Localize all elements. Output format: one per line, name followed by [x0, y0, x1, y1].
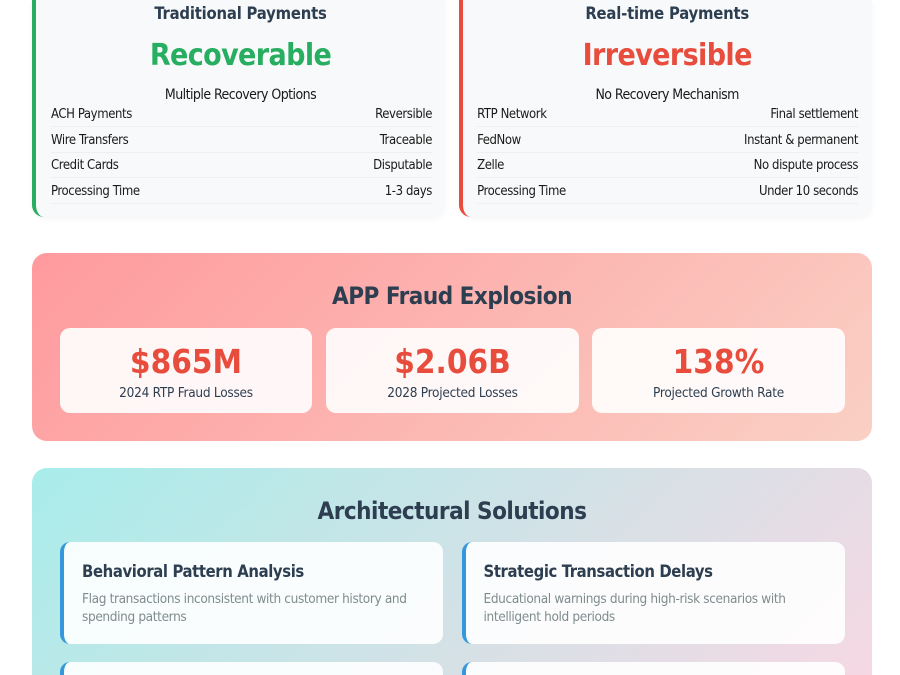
solution card: strategic transaction delays [462, 542, 844, 644]
solution title: Strategic Transaction Delays [484, 562, 713, 581]
row: FedNow [477, 127, 858, 153]
row: credit cards [51, 152, 432, 178]
solution card: lower right, cut off [462, 662, 844, 675]
row: FedNow: Instant & permanent [744, 133, 858, 148]
solution card: lower left, cut off [60, 662, 443, 675]
solution description: Educational warnings during high-risk scenarios with [484, 591, 786, 607]
stat label: 2028 Projected Losses [387, 385, 518, 401]
heading: APP fraud explosion: APP Fraud Explosion [332, 282, 572, 310]
row: FedNow: FedNow [477, 133, 521, 148]
panel: traditional payments [32, 0, 445, 217]
heading: real-time payments: Real-time Payments [585, 4, 749, 23]
row: Zelle [477, 152, 858, 178]
subtitle: recovery options: Multiple Recovery Options [165, 87, 316, 103]
row: processing time: 1-3 days [385, 184, 432, 199]
stat value: 138% [673, 342, 764, 381]
row: wire transfers: Wire Transfers [51, 133, 128, 148]
row: Zelle: No dispute process [754, 158, 858, 173]
panel: architectural solutions [32, 468, 872, 675]
solution description: Flag transactions inconsistent with customer history and [82, 591, 407, 607]
solution card: behavioral pattern analysis [60, 542, 443, 644]
solution title: Behavioral Pattern Analysis [82, 562, 304, 581]
row: ACH payments: Reversible [375, 107, 432, 122]
solution description [82, 591, 407, 625]
heading: architectural solutions: Architectural Solutions [318, 497, 586, 525]
solution description: intelligent hold periods [484, 609, 615, 625]
status: recoverable: Recoverable [150, 38, 331, 73]
row: processing time [477, 178, 858, 204]
row: processing time: Processing Time [477, 184, 566, 199]
row: RTP network: RTP Network [477, 107, 547, 122]
status: irreversible: Irreversible [583, 38, 752, 73]
heading: traditional payments: Traditional Payments [154, 4, 327, 23]
row: processing time [51, 178, 432, 204]
panel: real-time payments [459, 0, 872, 217]
row: RTP network: Final settlement [770, 107, 858, 122]
panel: APP fraud explosion [32, 253, 872, 441]
row: RTP network [477, 101, 858, 127]
row: Zelle: Zelle [477, 158, 504, 173]
row: processing time: Under 10 seconds [759, 184, 858, 199]
stat value: $865M [130, 342, 242, 381]
row: ACH payments: ACH Payments [51, 107, 132, 122]
stat card: 2024 losses [60, 328, 312, 413]
subtitle: no recovery mechanism: No Recovery Mechanism [595, 87, 739, 103]
stat label: Projected Growth Rate [653, 385, 784, 401]
row: ACH payments [51, 101, 432, 127]
stat label: 2024 RTP Fraud Losses [119, 385, 253, 401]
solution description: spending patterns [82, 609, 186, 625]
stat card: 2028 losses [326, 328, 579, 413]
stat value: $2.06B [394, 342, 511, 381]
row: wire transfers: Traceable [380, 133, 432, 148]
stat card: growth rate [592, 328, 845, 413]
row: credit cards: Credit Cards [51, 158, 118, 173]
row: wire transfers [51, 127, 432, 153]
row: processing time: Processing Time [51, 184, 140, 199]
row: credit cards: Disputable [373, 158, 432, 173]
solution description [484, 591, 786, 625]
